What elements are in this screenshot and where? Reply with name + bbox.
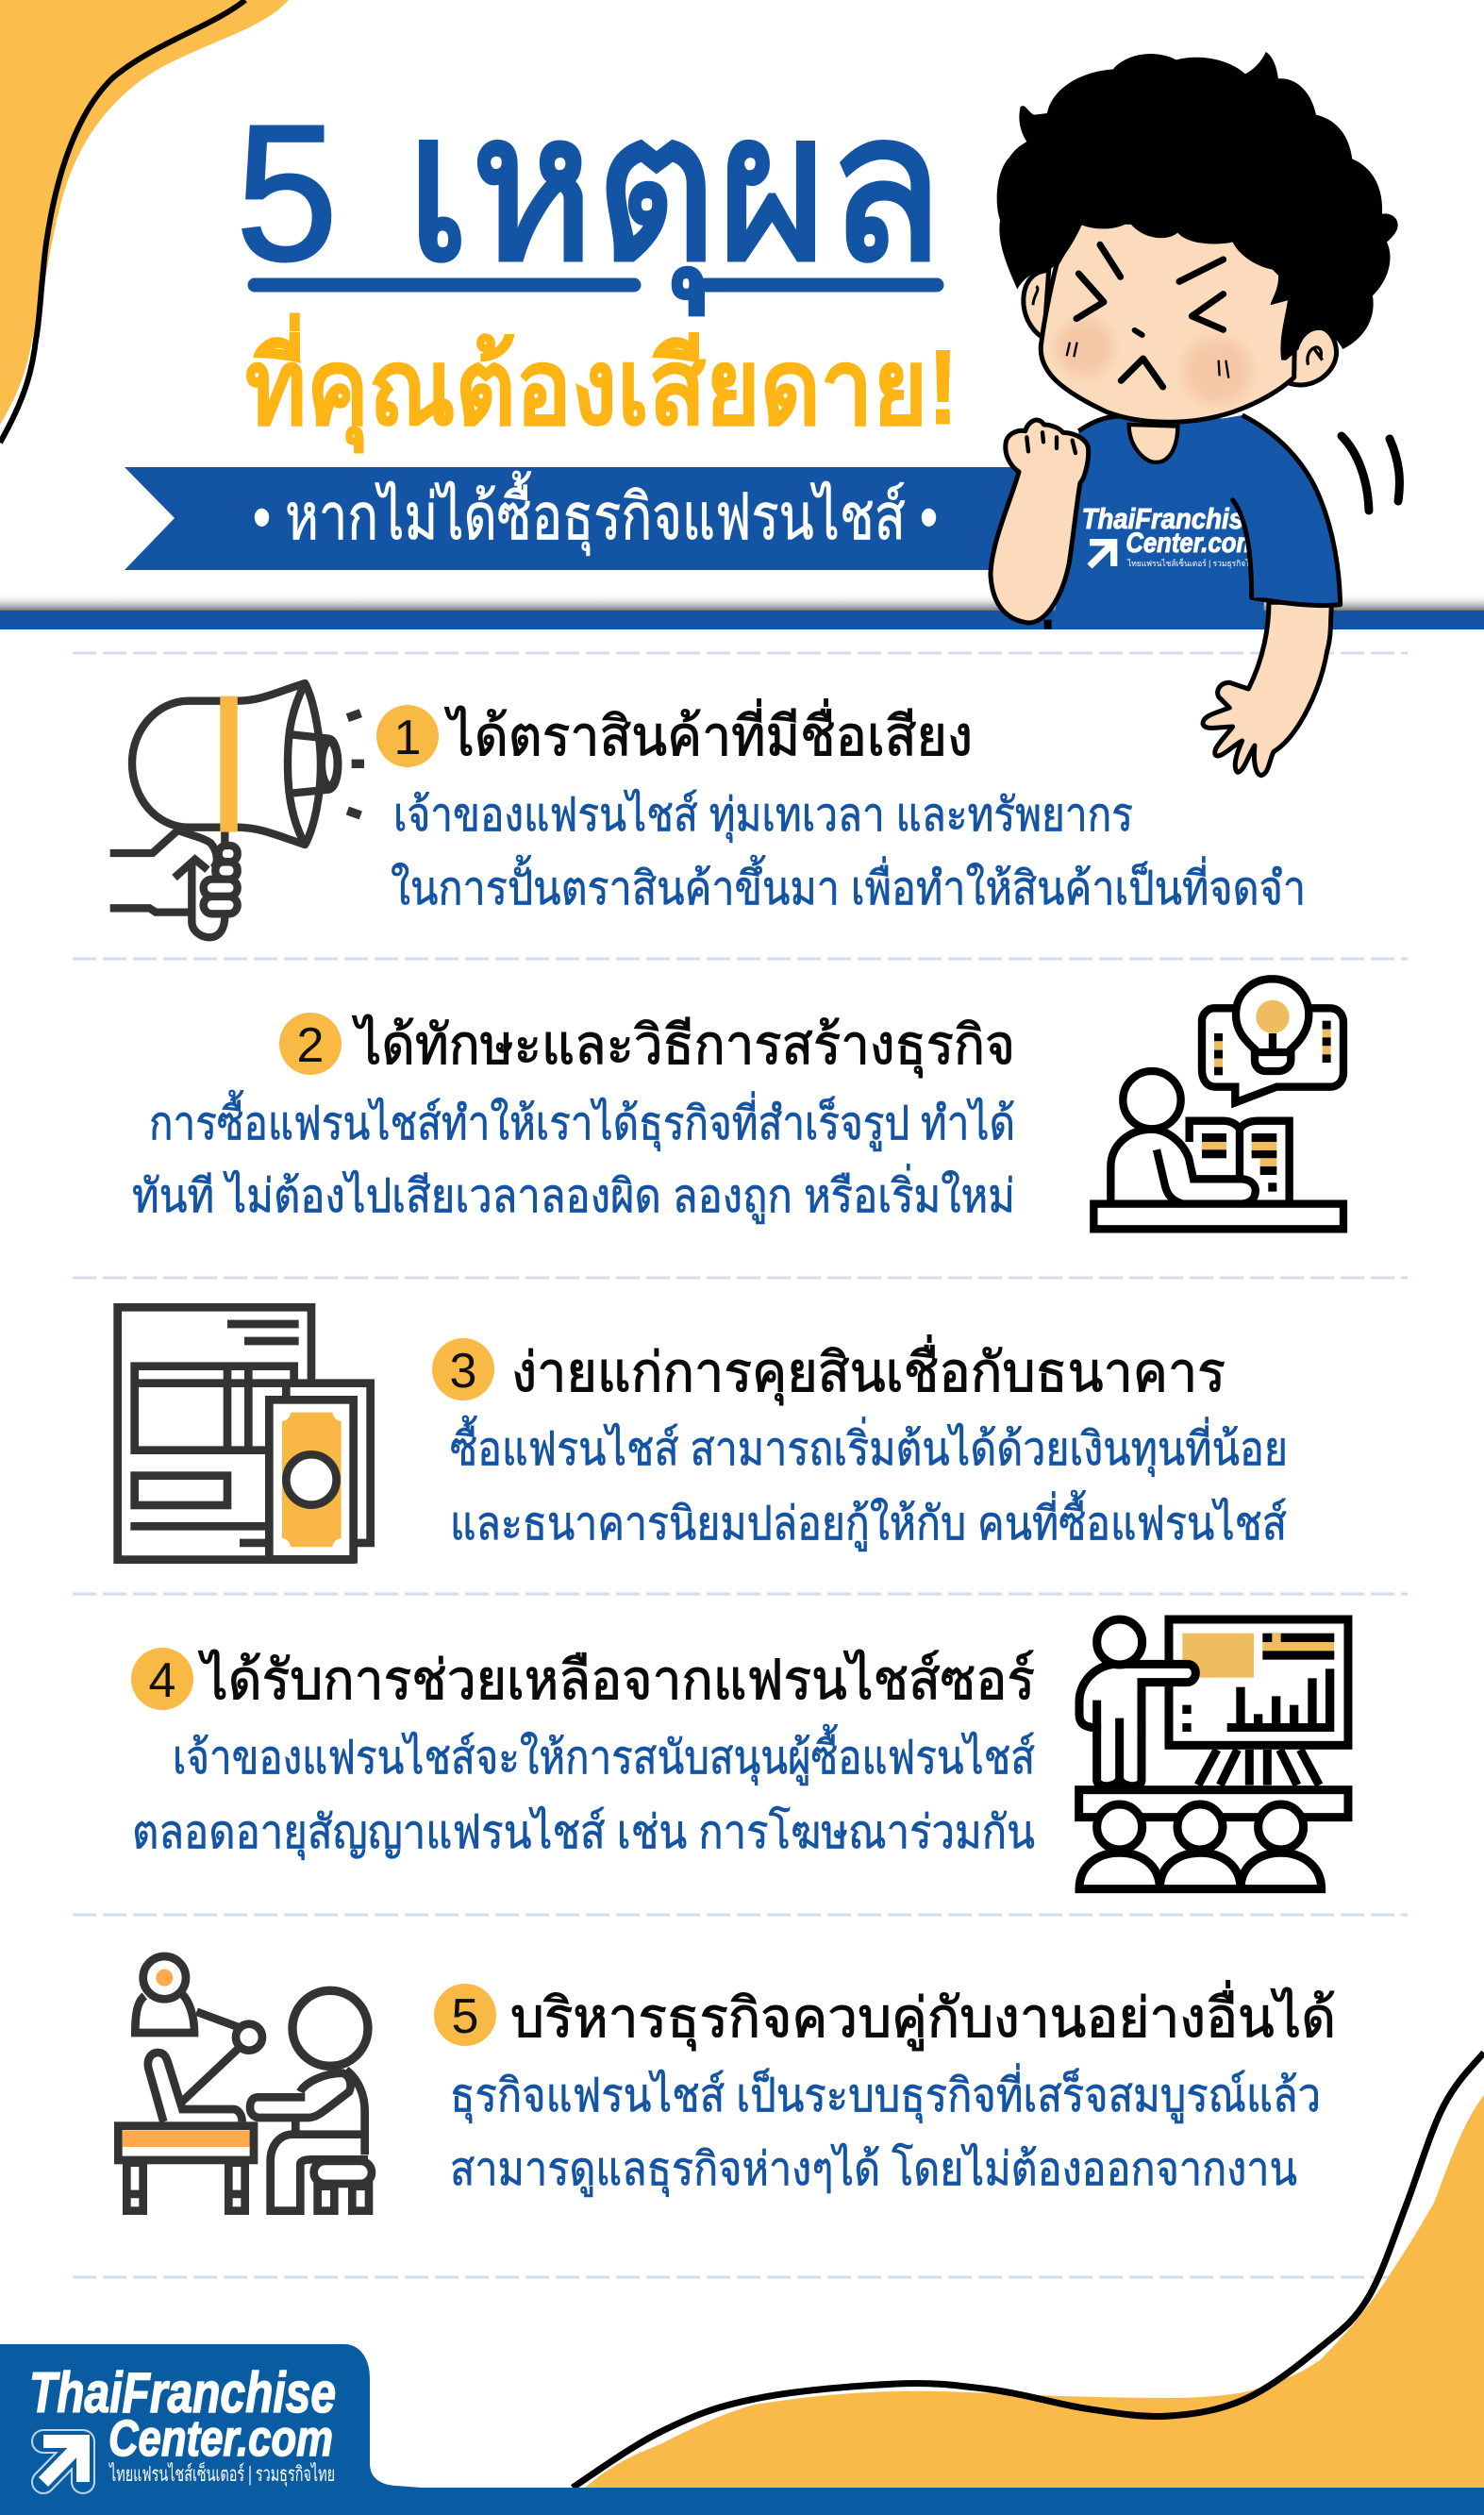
body 3: และธนาคารนิยมปล่อยกู้ให้กับ คนที่ซื้อแฟรนไชส์ [450,1490,1287,1551]
body 3 [450,1416,1288,1551]
icon: person at desk with lamp and laptop [118,1956,372,2211]
item 5 [118,1956,1336,2211]
motion lines [1342,436,1399,511]
heading 3: ง่ายแก่การคุยสินเชื่อกับธนาคาร [511,1334,1226,1406]
logo text [29,2361,336,2487]
number badge 1 [376,705,439,767]
main title: เหตุผล [406,71,943,315]
heading 5: บริหารธุรกิจควบคู่กับงานอย่างอื่นได้ [510,1980,1336,2052]
main title: 5 [236,85,338,301]
banner ribbon [125,467,1019,570]
body 2: การซื้อแฟรนไชส์ทำให้เราได้ธุรกิจที่สำเร็จรูป ทำได้ [149,1090,1015,1151]
logo arrow [43,2441,83,2482]
section divider lines [73,653,1408,2277]
footer band [0,2488,1484,2515]
body 2 [132,1090,1015,1224]
body 3: ซื้อแฟรนไชส์ สามารถเริ่มต้นได้ด้วยเงินทุนที่น้อย [450,1416,1288,1477]
body 1 [391,788,1306,914]
shirt logo: ThaiFranchise [1082,503,1258,535]
number badge 4: 4 [149,1653,175,1708]
logo text: ไทยแฟรนไชส์เซ็นเตอร์ | รวมธุรกิจไทย [108,2460,335,2487]
item 4 [131,1619,1348,1889]
body 5: ธุรกิจแฟรนไชส์ เป็นระบบธุรกิจที่เสร็จสมบูรณ์แล้ว [450,2063,1321,2123]
icon: person reading with idea bubble [1093,979,1343,1229]
title underline [255,277,937,293]
heading 4: ได้รับการช่วยเหลือจากแฟรนไชส์ซอร์ [198,1649,1035,1711]
logo text: Center.com [108,2410,333,2467]
shirt logo: Center.com [1126,528,1258,559]
item 3 [118,1307,1288,1560]
number badge 5: 5 [452,1989,478,2044]
body 4 [132,1724,1035,1860]
body 5 [450,2063,1321,2197]
number badge 3 [432,1338,494,1400]
number badge 2: 2 [297,1018,324,1073]
body, arms and shirt [991,415,1341,776]
banner text: • หากไม่ได้ซื้อธุรกิจแฟรนไชส์ • [253,471,938,556]
number badge 5 [434,1984,496,2046]
icon: presenter with audience [1079,1619,1348,1889]
hair [997,52,1398,360]
number badge 3: 3 [450,1344,476,1399]
character: frustrated man in blue shirt [991,52,1399,776]
logo text: ThaiFranchise [29,2361,336,2424]
number badge 4 [131,1648,193,1710]
icon: megaphone [110,683,364,937]
header band [0,593,1484,629]
shirt logo: ไทยแฟรนไชส์เซ็นเตอร์ | รวมธุรกิจไทย [1126,557,1259,569]
head [997,52,1398,462]
body 4: ตลอดอายุสัญญาแฟรนไชส์ เช่น การโฆษณาร่วมกัน [132,1805,1035,1860]
body 1: ในการปั้นตราสินค้าขึ้นมา เพื่อทำให้สินค้าเป็นที่จดจำ [391,855,1306,914]
shirt logo [1082,503,1259,569]
subtitle: ที่คุณต้องเสียดาย! [245,312,959,454]
heading 1: ได้ตราสินค้าที่มีชื่อเสียง [444,698,973,767]
number badge 2 [279,1013,342,1075]
decorative wave: bottom right [573,2053,1484,2488]
body 5: สามารดูแลธุรกิจห่างๆได้ โดยไม่ต้องออกจากงาน [450,2142,1297,2197]
number badge 1: 1 [394,711,421,765]
body 1: เจ้าของแฟรนไชส์ ทุ่มเทเวลา และทรัพยากร [393,788,1133,843]
decorative corner wave: top left [0,0,289,443]
icon: documents and banknote [118,1307,371,1560]
item 1 [110,683,1306,937]
footer logo panel [0,2344,434,2489]
heading 2: ได้ทักษะและวิธีการสร้างธุรกิจ [352,1014,1015,1079]
body 2: ทันที ไม่ต้องไปเสียเวลาลองผิด ลองถูก หรือเริ่มใหม่ [132,1164,1015,1224]
body 4: เจ้าของแฟรนไชส์จะให้การสนับสนุนผู้ซื้อแฟรนไชส์ [173,1724,1035,1786]
main title [236,71,943,315]
item 2 [132,979,1343,1229]
